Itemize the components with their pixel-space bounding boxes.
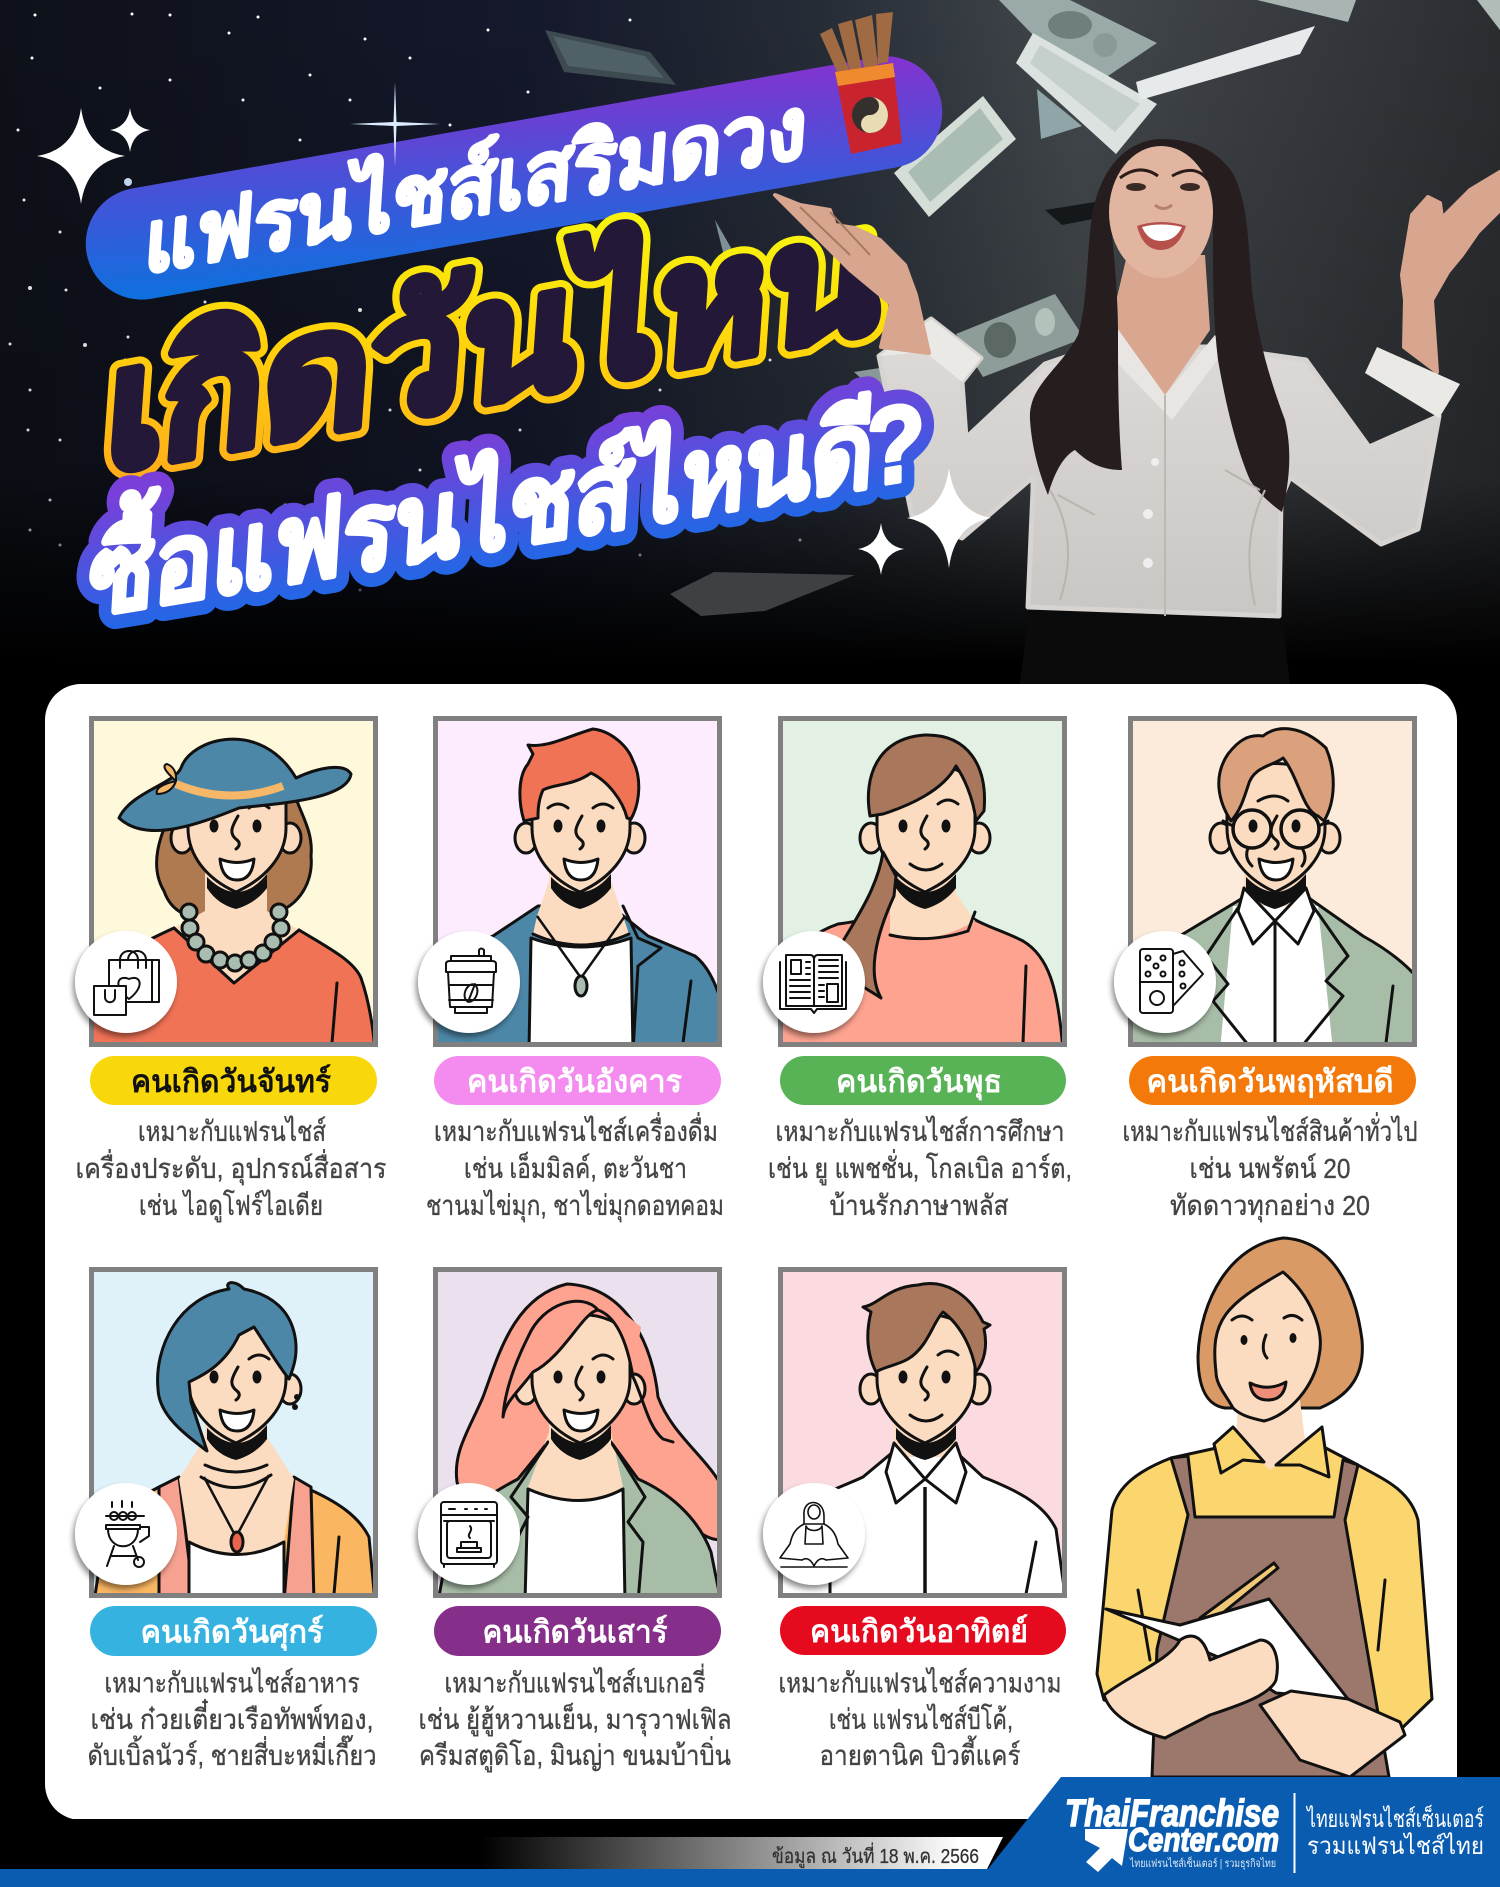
pill: Thursday: คนเกิดวันพฤหัสบดี bbox=[1146, 1064, 1394, 1099]
tagline bbox=[1306, 1804, 1484, 1860]
portrait: long pink-haired woman bbox=[433, 1267, 725, 1602]
icon: shopping bags bbox=[75, 931, 177, 1033]
pill: Wednesday bbox=[780, 1056, 1066, 1105]
starfield bbox=[8, 12, 802, 592]
title: ซื้อแฟรนไชส์ไหนดี?: ซื้อแฟรนไชส์ไหนดี? bbox=[68, 361, 934, 639]
text: Sunday: อายตานิค บิวตี้แคร์ bbox=[820, 1735, 1020, 1771]
logo wordmark: ThaiFranchise bbox=[1065, 1793, 1279, 1835]
text: Saturday bbox=[418, 1664, 732, 1773]
text: Friday bbox=[88, 1668, 376, 1771]
text: Thursday: เหมาะกับแฟรนไชส์สินค้าทั่วไป bbox=[1122, 1112, 1418, 1147]
text: Friday: ดับเบิ้ลนัวร์, ชายสี่บะหมี่เกี๊ยว bbox=[88, 1735, 376, 1771]
text: Wednesday: เหมาะกับแฟรนไชส์การศึกษา bbox=[776, 1116, 1064, 1147]
text: Saturday: เหมาะกับแฟรนไชส์เบเกอรี่ bbox=[444, 1664, 706, 1698]
title: ซื้อแฟรนไชส์ไหนดี?: ซื้อแฟรนไชส์ไหนดี? bbox=[68, 361, 934, 639]
portrait: older man with glasses bbox=[1123, 716, 1420, 1051]
text: Tuesday: ชานมไข่มุก, ชาไข่มุกดอทคอม bbox=[426, 1190, 724, 1223]
text: Monday: เหมาะกับแฟรนไชส์ bbox=[138, 1116, 326, 1147]
icon: incense box with yin-yang bbox=[820, 12, 902, 154]
pill: Monday: คนเกิดวันจันทร์ bbox=[131, 1064, 331, 1099]
icon: coffee cup bbox=[418, 931, 520, 1033]
pill: Monday bbox=[90, 1056, 377, 1105]
text: Saturday: เช่น ยู้ฮู้หวานเย็น, มารุวาฟเฟิล bbox=[418, 1702, 732, 1737]
pill: Friday: คนเกิดวันศุกร์ bbox=[140, 1614, 324, 1652]
text: Wednesday: เช่น ยู แพชชั่น, โกลเบิล อาร์ต, bbox=[768, 1149, 1072, 1186]
title: เกิดวันไหน: เกิดวันไหน bbox=[77, 182, 889, 504]
text: Sunday: เช่น แฟรนไชส์บีโค้, bbox=[829, 1703, 1013, 1735]
text: Monday: เช่น ไอดูโฟร์ไอเดีย bbox=[139, 1189, 323, 1223]
white content panel bbox=[45, 684, 1457, 1820]
falling money bills bbox=[545, 0, 1500, 616]
text: Sunday: เหมาะกับแฟรนไชส์ความงาม bbox=[778, 1668, 1062, 1698]
text: Friday: เหมาะกับแฟรนไชส์อาหาร bbox=[104, 1668, 360, 1698]
photo: raised left hand overlapping title bbox=[775, 195, 929, 353]
text: Monday bbox=[76, 1116, 386, 1223]
pill: Thursday bbox=[1129, 1056, 1416, 1105]
illustration: waitress with notepad bbox=[1097, 1238, 1432, 1777]
portrait: man in white shirt bbox=[773, 1267, 1067, 1602]
text: Tuesday: เหมาะกับแฟรนไชส์เครื่องดื่ม bbox=[434, 1112, 718, 1147]
portrait: blue-haired woman bbox=[89, 1267, 378, 1602]
panel: Thursday bbox=[1114, 716, 1420, 1223]
panel: Friday bbox=[75, 1267, 378, 1771]
pill: Tuesday: คนเกิดวันอังคาร bbox=[467, 1064, 682, 1099]
tagline: รวมแฟรนไชส์ไทย bbox=[1307, 1832, 1484, 1860]
panel: Saturday bbox=[418, 1267, 732, 1773]
text: Tuesday bbox=[426, 1112, 724, 1223]
logo wordmark: Center.com bbox=[1128, 1821, 1279, 1858]
text: Monday: เครื่องประดับ, อุปกรณ์สื่อสาร bbox=[76, 1149, 386, 1186]
icon: logo arrow bbox=[1085, 1829, 1128, 1872]
portrait: red-haired man bbox=[428, 716, 725, 1051]
footer: date strip: ข้อมูล ณ วันที่ 18 พ.ค. 2566 bbox=[772, 1842, 979, 1869]
panel: Sunday bbox=[763, 1267, 1067, 1771]
photo: woman with raised arms bbox=[879, 139, 1500, 684]
title: เกิดวันไหน: เกิดวันไหน bbox=[77, 182, 889, 504]
title banner: pill line: แฟรนไชส์เสริมดวง bbox=[130, 79, 814, 291]
text: Sunday bbox=[778, 1668, 1062, 1771]
text: Thursday bbox=[1122, 1112, 1418, 1223]
text: Thursday: ทัดดาวทุกอย่าง 20 bbox=[1170, 1190, 1370, 1223]
logo wordmark: ไทยแฟรนไชส์เซ็นเตอร์ | รวมธุรกิจไทย bbox=[1129, 1856, 1276, 1870]
text: Wednesday: บ้านรักภาษาพลัส bbox=[830, 1190, 1008, 1221]
pill: Saturday bbox=[434, 1606, 721, 1656]
logo wordmark bbox=[1065, 1793, 1279, 1872]
footer: blue logo block bbox=[0, 1777, 1500, 1887]
pill: Tuesday bbox=[434, 1056, 721, 1105]
pill: Sunday bbox=[780, 1606, 1066, 1655]
icon: meditating woman bbox=[763, 1483, 865, 1585]
pill: Friday bbox=[90, 1606, 377, 1656]
portrait: hat woman bbox=[84, 716, 378, 1051]
header hero background bbox=[0, 0, 1500, 684]
icon: barbecue grill bbox=[75, 1483, 177, 1585]
icon: dominoes bbox=[1114, 931, 1216, 1033]
title banner: pill line bbox=[77, 47, 951, 309]
portrait: ponytail woman bbox=[773, 716, 1067, 1051]
icon: open book bbox=[763, 931, 865, 1033]
pill: Saturday: คนเกิดวันเสาร์ bbox=[482, 1614, 668, 1650]
pill: Sunday: คนเกิดวันอาทิตย์ bbox=[810, 1614, 1028, 1649]
text: Saturday: ครีมสตูดิโอ, มินญ่า ขนมบ้าบิ่น bbox=[419, 1736, 731, 1773]
icon: oven with cake bbox=[418, 1483, 520, 1585]
text: Wednesday bbox=[768, 1116, 1072, 1221]
text: Thursday: เช่น นพรัตน์ 20 bbox=[1190, 1153, 1350, 1184]
panel: Wednesday bbox=[763, 716, 1072, 1221]
panel: Monday bbox=[75, 716, 386, 1223]
panel: Tuesday bbox=[418, 716, 725, 1223]
sparkle stars bbox=[37, 82, 991, 575]
text: Friday: เช่น ก๋วยเตี๋ยวเรือทัพพ์ทอง, bbox=[90, 1699, 374, 1735]
pill: Wednesday: คนเกิดวันพุธ bbox=[836, 1064, 1002, 1101]
footer: date strip bbox=[0, 1819, 1040, 1869]
text: Tuesday: เช่น เอ็มมิลค์, ตะวันชา bbox=[464, 1151, 687, 1184]
